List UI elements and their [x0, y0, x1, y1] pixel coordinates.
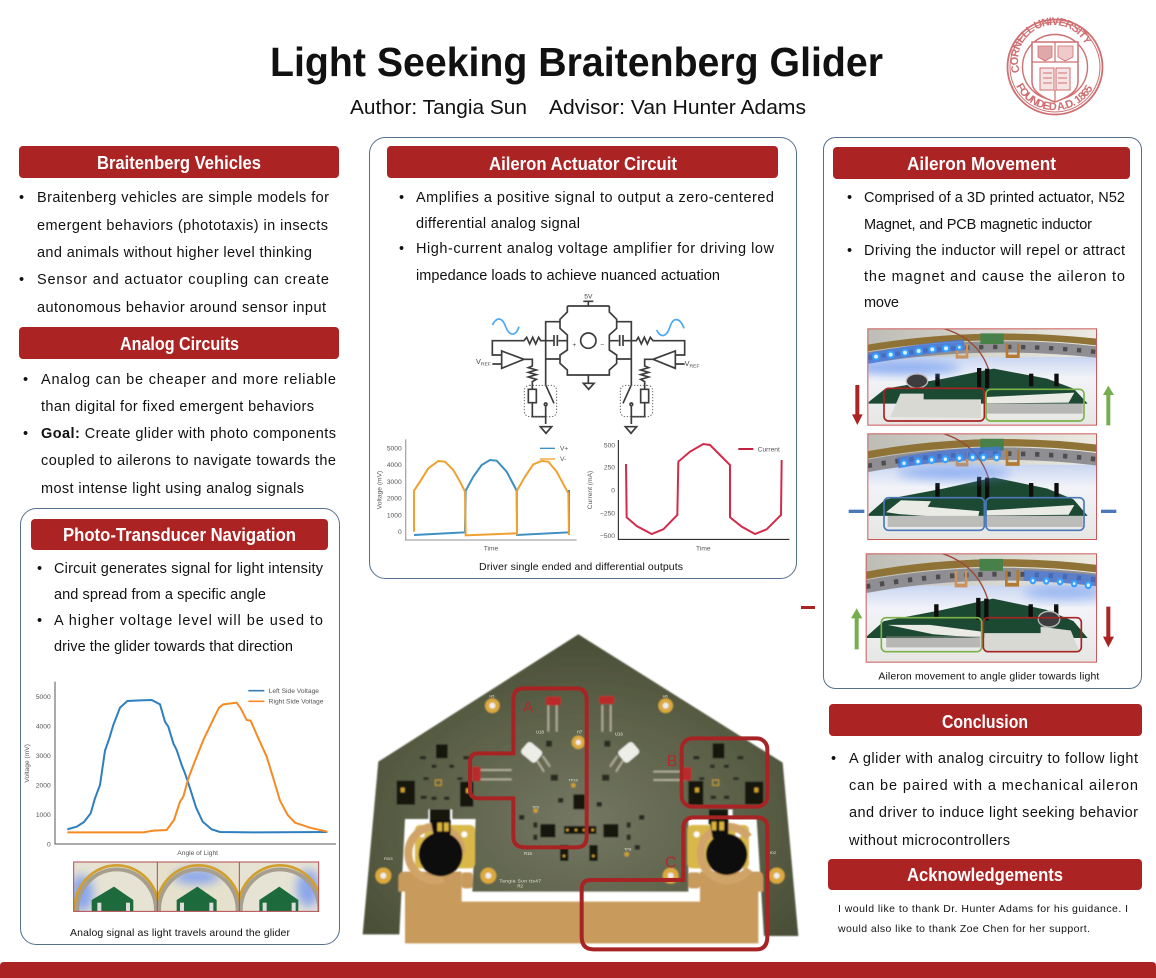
board silkscreen: R2 [517, 884, 523, 889]
line chart: V+ and V- driver outputs: Time [484, 545, 499, 552]
board silkscreen: TP8 [624, 847, 632, 852]
text: Braitenberg bullets: emergent behaviors (phototaxis) in insects [37, 218, 328, 234]
board silkscreen: Tangia Sun tts47 [499, 879, 541, 885]
board silkscreen: TP9 [532, 805, 540, 810]
line chart: left and right side voltage: Right Side Voltage [269, 699, 324, 706]
caption: driver outputs: Driver single ended and differential outputs [479, 561, 683, 573]
footer bar [0, 962, 1156, 978]
text: thanks: I would like to thank Dr. Hunter Adams for his guidance. I [838, 903, 1128, 915]
heading: Photo-Transducer Navigation [31, 519, 328, 550]
text: Braitenberg bullets: and animals without higher level thinking [37, 245, 312, 261]
text: Photo-transducer bullets [37, 561, 324, 655]
panel: Aileron Movement [824, 138, 1142, 688]
text: Actuator bullets: impedance loads to achieve nuanced actuation [416, 268, 720, 284]
board silkscreen: FID3 [384, 856, 393, 861]
aileron body [398, 872, 763, 943]
text: Actuator bullets: Amplifies a positive signal to output a zero-centered [416, 190, 774, 206]
photos: aileron positions [848, 329, 1116, 683]
arrow: green up [1103, 386, 1114, 425]
text: Conclusion bullet: A glider with analog circuitry to follow light [849, 751, 1138, 767]
line chart: differential current: −500 [600, 533, 615, 540]
text: Actuator bullets: High-current analog voltage amplifier for driving low [416, 241, 775, 257]
heading: Acknowledgements [828, 859, 1142, 890]
text: Analog bullets: than digital for fixed emergent behaviors [41, 399, 314, 415]
caption: aileron movement: Aileron movement to angle glider towards light [878, 672, 1099, 683]
text: Analog bullets: • [23, 372, 28, 388]
heading: Photo-Transducer Navigation: Photo-Transducer Navigation [63, 525, 296, 545]
board silkscreen: H5 [489, 693, 495, 698]
line chart: V+ and V- driver outputs: 3000 [387, 479, 402, 486]
text: Actuator bullets: • [399, 241, 404, 257]
text: Conclusion bullet: without microcontrollers [848, 833, 1010, 849]
text: Braitenberg bullets: • [19, 272, 24, 288]
panel: Photo-Transducer Navigation [20, 508, 340, 955]
text: Aileron movement bullets: • [847, 243, 852, 259]
text: Photo-transducer bullets: drive the glider towards that direction [54, 639, 293, 655]
line chart: differential current: 0 [611, 487, 615, 494]
line chart: left and right side voltage: Angle of Light [177, 850, 218, 857]
photo: left aileron down [848, 329, 1097, 425]
callout: region B amplifier [667, 738, 767, 807]
marker: blue dash left [849, 510, 864, 513]
text: Aileron movement bullets: Comprised of a 3D printed actuator, N52 [864, 190, 1125, 206]
arrow: red down [1103, 607, 1114, 647]
photo: right aileron down [866, 554, 1104, 662]
callout: region B amplifier: B [667, 753, 677, 770]
text: Actuator bullets: differential analog signal [416, 216, 580, 232]
board silkscreen: R16 [524, 851, 533, 856]
text: thanks [837, 903, 1128, 935]
text: Braitenberg bullets: Braitenberg vehicles are simple models for [37, 190, 329, 206]
caption: analog signal: Analog signal as light travels around the glider [70, 927, 290, 939]
heading: Analog Circuits [19, 327, 339, 359]
PCB render with highlighted regions [363, 634, 798, 949]
authors: Advisor: Van Hunter Adams [549, 97, 806, 119]
line chart: left and right side voltage: 1000 [36, 812, 51, 819]
panel: Aileron Actuator Circuit [370, 138, 796, 578]
circuit diagram: H-bridge driver: V [685, 359, 690, 368]
text: Analog bullets: Goal: Create glider with photo components [41, 426, 336, 442]
callout: region C aileron: C [665, 855, 677, 872]
title: Light Seeking Braitenberg Glider [270, 39, 883, 85]
heading: Braitenberg Vehicles: Braitenberg Vehicles [97, 153, 261, 173]
panel: Analog Circuits [19, 327, 339, 497]
heading: Braitenberg Vehicles [19, 146, 339, 178]
line chart: V+ and V- driver outputs: 2000 [387, 496, 402, 503]
board silkscreen: H6 [663, 693, 669, 698]
line chart: differential current: Time [696, 545, 711, 552]
callout: region A photo-transducers: A [523, 699, 534, 716]
text: Braitenberg bullets: • [19, 190, 24, 206]
panel: Acknowledgements [828, 859, 1142, 935]
line chart: left and right side voltage: 0 [47, 841, 51, 848]
text: Aileron movement bullets: Magnet, and PCB magnetic inductor [864, 217, 1092, 233]
line chart: differential current: Current (mA) [587, 471, 594, 509]
line chart: V+ and V- driver outputs: Voltage (mV) [376, 471, 383, 509]
text: Photo-transducer bullets: and spread from a specific angle [54, 587, 266, 603]
arrow: red down [852, 385, 863, 425]
heading: Aileron Actuator Circuit [387, 146, 778, 178]
heading: Analog Circuits: Analog Circuits [120, 334, 239, 354]
line chart: left and right side voltage: Left Side Voltage [269, 688, 319, 695]
text: Conclusion bullet: and driver to induce light seeking behavior [849, 805, 1138, 821]
board silkscreen: H7 [577, 729, 583, 734]
text: Conclusion bullet: can be paired with a mechanical aileron [849, 778, 1138, 794]
callout: region A photo-transducers [470, 688, 587, 847]
line chart: V+ and V- driver outputs: V+ [560, 446, 568, 453]
text: Actuator bullets [399, 190, 775, 284]
text: Analog bullets [23, 372, 336, 497]
callout: region C aileron [582, 817, 767, 949]
board silkscreen: TP10 [568, 778, 579, 783]
arrow: green up [851, 608, 862, 649]
board silkscreen: U16 [615, 732, 624, 737]
text: Photo-transducer bullets: Circuit generates signal for light intensity [54, 561, 324, 577]
circuit diagram: H-bridge driver: − [600, 342, 604, 349]
line chart: V+ and V- driver outputs: 0 [398, 529, 402, 536]
circuit diagram: H-bridge driver: REF [481, 362, 491, 368]
text: Analog bullets: • [23, 426, 28, 442]
board silkscreen: U18 [536, 729, 545, 734]
line chart: V+ and V- driver outputs: 1000 [387, 513, 402, 520]
text: Analog bullets: most intense light using analog signals [41, 481, 304, 497]
line chart: left and right side voltage: 3000 [36, 753, 51, 760]
text: Photo-transducer bullets: A higher voltage level will be used to [54, 613, 323, 629]
line chart: left and right side voltage: Voltage (mV) [24, 744, 31, 783]
marker: blue dash right [1101, 510, 1116, 513]
logo: Cornell University seal: CORNELL UNIVERSITY [1010, 17, 1092, 73]
line chart: differential current: 250 [604, 465, 615, 472]
line chart: V+ and V- driver outputs: V- [560, 456, 566, 463]
heading: Conclusion: Conclusion [942, 712, 1028, 732]
heading: Aileron Actuator Circuit: Aileron Actuator Circuit [489, 154, 677, 174]
line chart: left and right side voltage: 2000 [36, 783, 51, 790]
heading: Aileron Movement: Aileron Movement [907, 154, 1056, 174]
logo: Cornell University seal: FOUNDED A.D. 1865 [1016, 82, 1092, 110]
text: Braitenberg bullets: autonomous behavior around sensor input [37, 300, 326, 316]
heading: Aileron Movement [833, 147, 1130, 179]
text: Analog bullets: Analog can be cheaper and more reliable [41, 372, 336, 388]
text: Actuator bullets: • [399, 190, 404, 206]
photo strip: light around glider [70, 862, 322, 955]
text: Analog bullets: coupled to ailerons to navigate towards the [41, 453, 336, 469]
line chart: V+ and V- driver outputs [376, 439, 577, 552]
authors: Author: Tangia Sun [350, 97, 527, 119]
panel: Braitenberg Vehicles [19, 146, 339, 316]
logo: Cornell University seal [1006, 17, 1104, 116]
panel: Conclusion [829, 704, 1142, 849]
line chart: left and right side voltage [24, 682, 336, 857]
text: Braitenberg bullets: Sensor and actuator coupling can create [37, 272, 329, 288]
heading: Conclusion [829, 704, 1142, 736]
circuit diagram: H-bridge driver: V [476, 357, 481, 366]
board [363, 634, 798, 943]
text: Aileron movement bullets [847, 190, 1125, 311]
line chart: differential current [587, 440, 789, 552]
line chart: differential current: Current [758, 446, 780, 453]
line chart: left and right side voltage: 4000 [36, 724, 51, 731]
line chart: left and right side voltage: 5000 [36, 694, 51, 701]
text: thanks: would also like to thank Zoe Chen for her support. [837, 923, 1090, 935]
text: Photo-transducer bullets: • [37, 613, 42, 629]
authors [350, 97, 806, 119]
line chart: V+ and V- driver outputs: 4000 [387, 462, 402, 469]
line chart: differential current: 500 [604, 442, 615, 449]
text: Conclusion bullet [831, 751, 1138, 849]
text: Conclusion bullet: • [831, 751, 836, 767]
text: Aileron movement bullets: Driving the inductor will repel or attract [864, 243, 1125, 259]
circuit diagram: H-bridge driver: + [572, 342, 576, 349]
text: Braitenberg bullets [19, 190, 329, 316]
photo: level ailerons [868, 434, 1097, 540]
marker: red dash [801, 606, 815, 609]
board silkscreen: ID2 [770, 850, 777, 855]
text: Aileron movement bullets: move [864, 295, 899, 311]
circuit diagram: H-bridge driver: 5V [584, 294, 593, 301]
line chart: differential current: −250 [600, 511, 615, 518]
heading: Acknowledgements: Acknowledgements [907, 865, 1063, 885]
line chart: V+ and V- driver outputs: 5000 [387, 446, 402, 453]
board silkscreen [384, 693, 777, 889]
circuit diagram: H-bridge driver [476, 294, 700, 433]
circuit diagram: H-bridge driver: REF [690, 364, 700, 370]
text: Aileron movement bullets: • [847, 190, 852, 206]
text: Photo-transducer bullets: • [37, 561, 42, 577]
text: Aileron movement bullets: the magnet and cause the aileron to [864, 269, 1125, 285]
